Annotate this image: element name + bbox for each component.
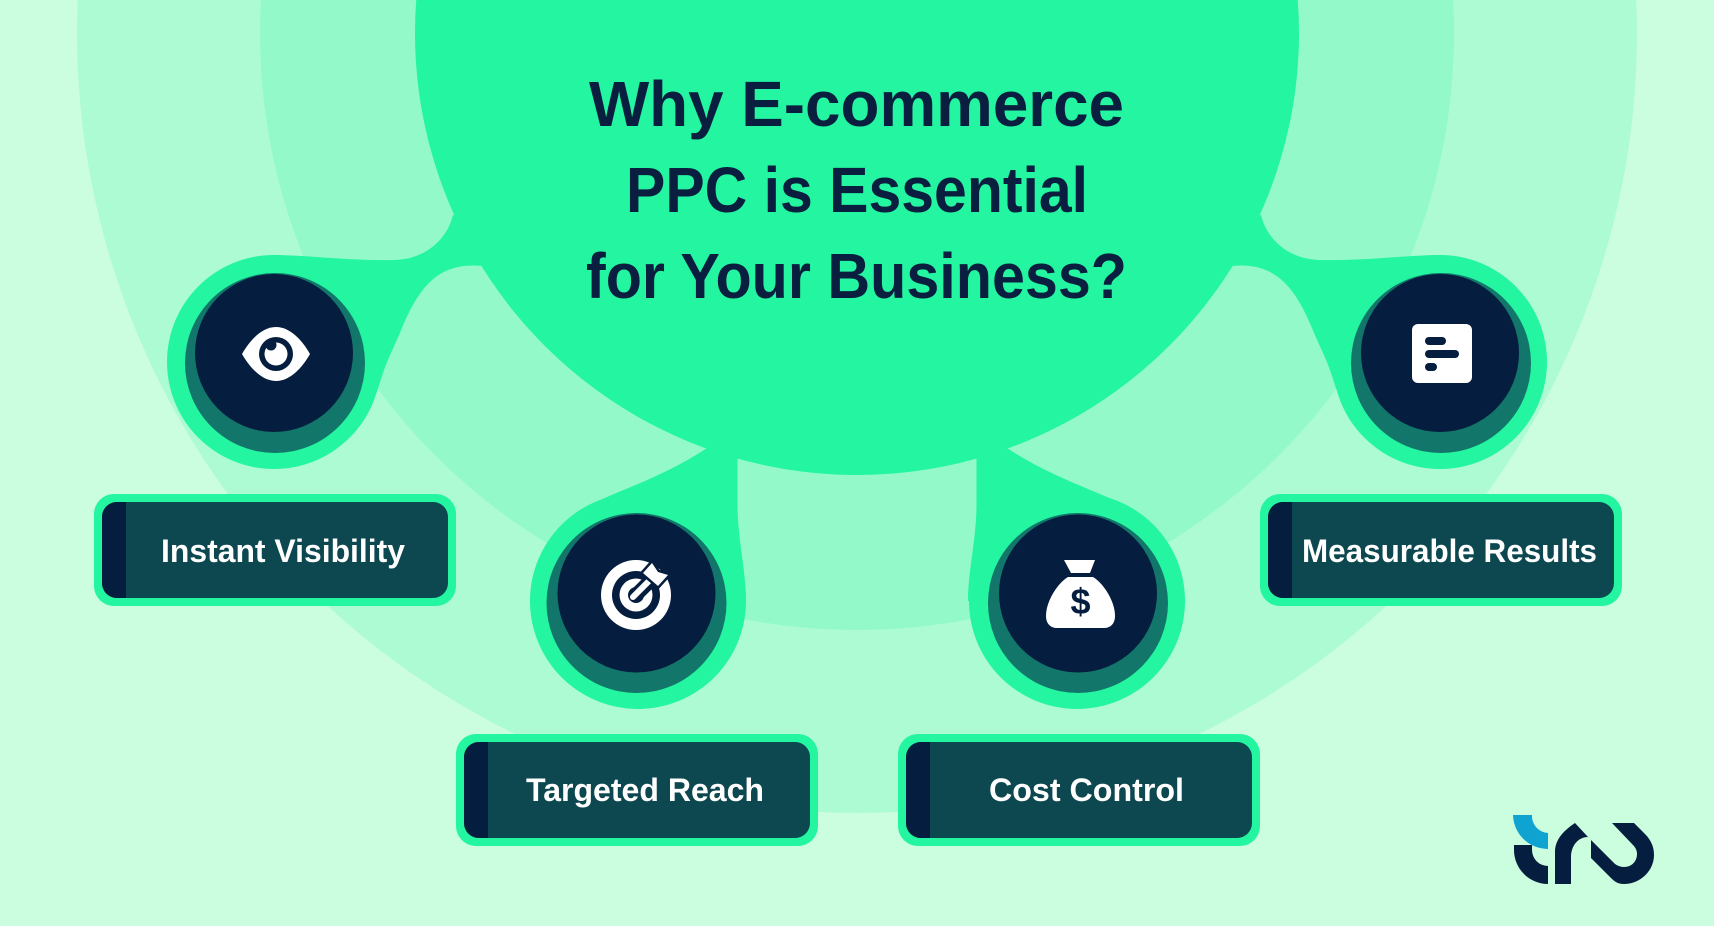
icon: money bag: $ bbox=[1070, 581, 1091, 622]
label: cost control: Cost Control bbox=[989, 772, 1184, 808]
node: instant visibility bbox=[167, 255, 381, 469]
logo bbox=[1513, 815, 1654, 884]
label: measurable results bbox=[1260, 494, 1622, 606]
label: instant visibility bbox=[94, 494, 456, 606]
node: targeted reach bbox=[530, 493, 746, 709]
icon: eye bbox=[242, 327, 310, 381]
label: measurable results: Measurable Results bbox=[1302, 533, 1597, 569]
label: targeted reach: Targeted Reach bbox=[526, 772, 764, 808]
icon: money bag bbox=[1046, 560, 1115, 628]
icon: target with arrow bbox=[601, 560, 671, 630]
title bbox=[586, 68, 1127, 312]
label: cost control bbox=[898, 734, 1260, 846]
concentric background rings bbox=[77, 0, 1637, 813]
title: PPC is Essential bbox=[626, 154, 1088, 226]
node: measurable results bbox=[1333, 255, 1547, 469]
central hub with connectors bbox=[274, 0, 1440, 601]
node: cost control bbox=[969, 493, 1185, 709]
label: instant visibility: Instant Visibility bbox=[161, 533, 405, 569]
label: targeted reach bbox=[456, 734, 818, 846]
title: Why E-commerce bbox=[589, 68, 1124, 140]
icon: report card bbox=[1412, 324, 1472, 383]
title: for Your Business? bbox=[586, 240, 1127, 312]
